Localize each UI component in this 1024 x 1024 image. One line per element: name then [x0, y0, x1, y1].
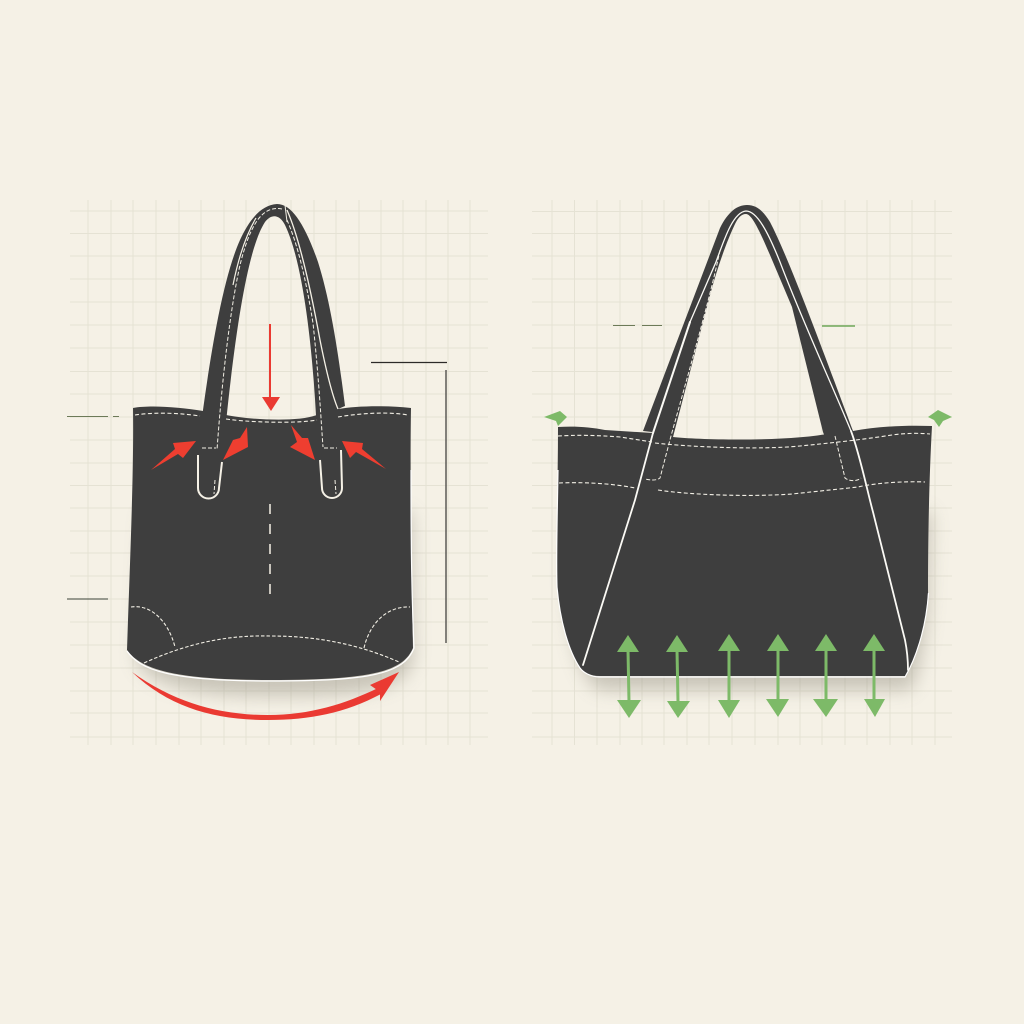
arrow: red inward far right — [342, 441, 386, 469]
bag shadow — [569, 512, 931, 690]
center dashed seam — [269, 504, 271, 594]
strap stitching — [645, 250, 861, 481]
bag body — [557, 426, 932, 676]
arrow: green 3 — [718, 634, 740, 718]
strap tab outlines and seams — [198, 205, 342, 499]
strap — [197, 204, 345, 499]
arrow: red inward left — [223, 427, 248, 460]
bag side edge highlight — [557, 470, 928, 677]
right tote bag — [557, 205, 932, 690]
arrow: red inward far left — [151, 441, 196, 470]
arrow: red curved under bag — [132, 672, 399, 720]
measure line: vertical height — [445, 370, 447, 643]
panel: right grid — [532, 200, 952, 745]
arrow: straight down red — [262, 324, 280, 411]
bag body — [127, 406, 413, 680]
arrow: green 4 — [766, 634, 789, 717]
arrow: green 2 — [666, 635, 690, 718]
strap white seams — [583, 211, 908, 670]
bag shadow — [137, 512, 413, 696]
tick: right upper left — [613, 324, 662, 326]
arrow: green top left corner — [544, 411, 567, 426]
tick: right upper right — [822, 325, 855, 327]
arrow: green 5 — [813, 634, 838, 717]
tick: left upper — [67, 416, 119, 418]
top edge stitching — [135, 413, 408, 422]
arrow: red inward right — [290, 425, 315, 460]
strap stitching — [202, 208, 337, 494]
bag lower edge highlight — [127, 470, 414, 681]
panel: left grid — [70, 200, 488, 745]
arrow: green 1 — [617, 635, 641, 718]
measure line: top horizontal — [371, 362, 447, 364]
top edge stitching — [558, 433, 930, 448]
lower seam stitching — [559, 482, 925, 495]
corner and base stitching — [131, 607, 410, 663]
straps — [640, 205, 870, 490]
tick: left lower — [67, 598, 108, 600]
left tote bag — [127, 204, 414, 696]
arrow: green 6 — [863, 634, 885, 717]
arrow: green top right corner — [928, 410, 952, 427]
green double arrows — [617, 634, 885, 718]
